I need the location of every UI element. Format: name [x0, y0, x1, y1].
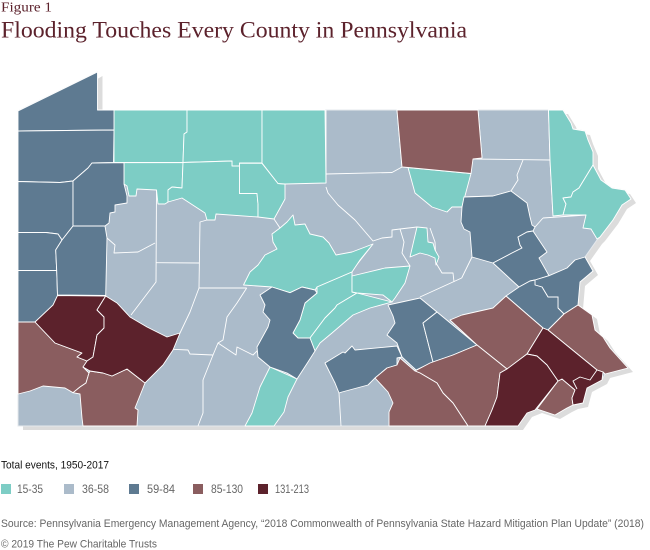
- legend: 131-213: [258, 484, 309, 496]
- legend: 59-84: 59-84: [147, 484, 176, 496]
- legend: 36-58: [64, 484, 109, 496]
- legend: 15-35: 15-35: [17, 484, 43, 496]
- legend: 85-130: 85-130: [211, 484, 243, 496]
- counties: 85-130 events: [18, 110, 628, 426]
- legend: 15-35: [1, 484, 43, 496]
- legend: 36-58: 36-58: [82, 484, 109, 496]
- counties: 15-35 events: [114, 110, 631, 426]
- state base: 36-58 counties: [18, 72, 631, 426]
- legend: 59-84: [129, 484, 176, 496]
- map drop shadow: [23, 76, 636, 430]
- map: Pennsylvania counties by total flood events: [18, 72, 636, 430]
- counties: 131-213 events: [35, 296, 603, 426]
- title: Flooding Touches Every County in Pennsylvania: [1, 18, 467, 42]
- legend: 131-213: 131-213: [275, 484, 309, 496]
- counties: 59-84 events: [18, 72, 593, 393]
- legend: 85-130: [193, 484, 243, 496]
- county boundaries: 36-58 group: [107, 110, 586, 426]
- figure label: Figure 1: [1, 0, 52, 16]
- legend: [1, 484, 309, 496]
- legend heading: Total events, 1950-2017: [1, 460, 109, 472]
